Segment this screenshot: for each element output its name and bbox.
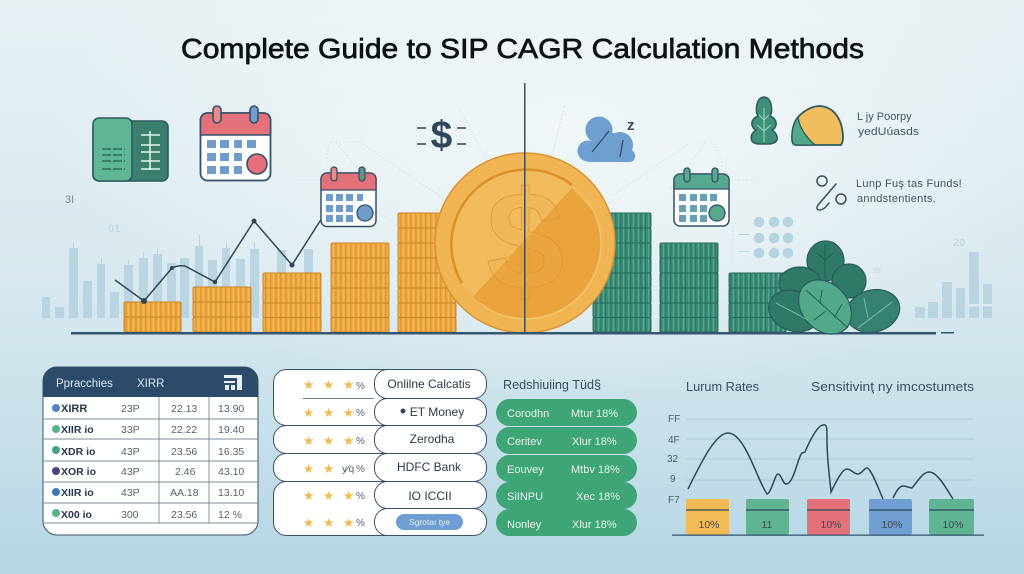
panel: green funds list bbox=[496, 378, 637, 536]
icon: small tree bbox=[751, 97, 777, 144]
text: lump sum note: Lunp Fuş tas Funds! bbox=[856, 178, 962, 190]
gold stack 4 bbox=[331, 243, 389, 332]
gold stack 2 bbox=[193, 287, 251, 332]
table rows: 300 bbox=[121, 509, 139, 521]
star rows: ★ bbox=[323, 489, 334, 503]
chart headings bbox=[686, 380, 974, 394]
faint axis numbers: 20 bbox=[953, 237, 965, 249]
star rows: ★ bbox=[303, 516, 314, 530]
green coin stacks bbox=[593, 213, 786, 332]
panel: star ratings and platforms bbox=[274, 370, 486, 536]
panel: star ratings and platforms: % bbox=[356, 436, 365, 447]
y axis labels: F7 bbox=[668, 495, 680, 506]
table rows: 43P bbox=[121, 466, 140, 478]
text: lump sum note bbox=[856, 178, 962, 205]
table header: XIRR bbox=[137, 378, 164, 390]
table rows bbox=[52, 403, 244, 521]
faint axis numbers: 33 bbox=[873, 268, 881, 275]
title: Complete Guide to SIP CAGR Calculation Methods bbox=[181, 33, 864, 64]
panel: star ratings and platforms: HDFC Bank bbox=[397, 460, 462, 474]
bar values: 10% bbox=[942, 519, 964, 531]
icon: blue cloud bbox=[578, 116, 635, 162]
panel: green funds list: Xlur 18% bbox=[572, 519, 617, 531]
green stack 1 bbox=[593, 213, 651, 332]
panel: green funds list: Mtur 18% bbox=[571, 408, 618, 420]
star rows: ★ bbox=[303, 434, 314, 448]
y axis labels: 9 bbox=[670, 474, 676, 485]
icon: central gold dollar coin bbox=[435, 153, 620, 340]
y axis labels: FF bbox=[668, 414, 680, 425]
panel: star ratings and platforms: IO ICCII bbox=[408, 489, 452, 503]
star rows: ★ bbox=[323, 434, 334, 448]
star rows: ★ bbox=[303, 462, 314, 476]
panel: sensitivity chart bbox=[667, 380, 984, 536]
table rows: 33P bbox=[121, 424, 140, 436]
text: top right note bbox=[857, 111, 920, 138]
icon: spreadsheet notebook bbox=[93, 118, 168, 181]
star rows: ★ bbox=[323, 406, 334, 420]
table rows: XOR io bbox=[61, 466, 96, 478]
table header bbox=[43, 367, 258, 397]
text: top right note: yedUúasds bbox=[858, 126, 920, 138]
chart headings: Sensitivinţ ny imcostumets bbox=[811, 380, 974, 394]
dotted guide lines bbox=[293, 105, 755, 270]
star rows: ★ bbox=[343, 489, 354, 503]
sensitivity line bbox=[688, 425, 953, 499]
chart bars bbox=[686, 499, 974, 534]
table rows: 22.22 bbox=[171, 424, 197, 436]
panel: green funds list: Xec 18% bbox=[576, 491, 620, 503]
table rows: 23.56 bbox=[171, 446, 197, 458]
icon: calendar small blue bbox=[321, 167, 376, 226]
table rows: 43P bbox=[121, 446, 140, 458]
bar values: 10% bbox=[698, 519, 720, 531]
rating pills bbox=[274, 370, 414, 536]
text: top right note: L jy Poorpy bbox=[857, 111, 912, 123]
star rows: ★ bbox=[343, 406, 354, 420]
growth line chart bbox=[115, 218, 322, 304]
y axis labels: 4F bbox=[668, 435, 680, 446]
star rows: ★ bbox=[323, 516, 334, 530]
panel: star ratings and platforms: y⁄q bbox=[342, 464, 354, 475]
table rows: 2.46 bbox=[175, 466, 196, 478]
star rows bbox=[303, 378, 354, 530]
faded background bars: right bbox=[915, 252, 993, 318]
ground baseline bbox=[71, 332, 954, 334]
center divider line bbox=[524, 83, 526, 333]
bar values: 10% bbox=[881, 519, 903, 531]
star rows: ★ bbox=[343, 378, 354, 392]
panel: XIRR comparison table bbox=[43, 367, 258, 535]
table rows: XIIR io bbox=[61, 424, 94, 436]
faint axis numbers: 3I bbox=[65, 194, 74, 206]
chart baseline bbox=[672, 534, 984, 536]
icon: calendar large bbox=[200, 106, 270, 180]
icon: dollar symbol with dashes bbox=[417, 114, 466, 157]
text: lump sum note: anndstentients. bbox=[857, 193, 936, 205]
panel: star ratings and platforms: % bbox=[356, 464, 365, 475]
panel: green funds list: Eouvey bbox=[507, 464, 544, 476]
star rows: ★ bbox=[323, 462, 334, 476]
bar values: 10% bbox=[820, 519, 842, 531]
star rows: ★ bbox=[343, 434, 354, 448]
table rows: 19.40 bbox=[218, 424, 244, 436]
panel: green funds list: Mtbv 18% bbox=[571, 464, 620, 476]
table rows: 13.90 bbox=[218, 403, 244, 415]
y axis labels: 32 bbox=[667, 454, 679, 465]
table rows: 43.10 bbox=[218, 466, 244, 478]
platform pills bbox=[374, 370, 486, 536]
icon: leaves cluster bbox=[763, 241, 905, 345]
table rows: 43P bbox=[121, 487, 140, 499]
green stack 3 bbox=[729, 273, 786, 332]
icon: central gold dollar coin: $ bbox=[486, 162, 564, 319]
gold stack 3 bbox=[263, 273, 321, 332]
table rows: XDR io bbox=[61, 446, 95, 458]
panel: star ratings and platforms: % bbox=[356, 518, 365, 529]
icon: calendar small green bbox=[674, 168, 729, 226]
icon: percent hook bbox=[817, 176, 846, 210]
panel: star ratings and platforms: Zerodha bbox=[410, 432, 455, 446]
panel: green funds list: SiINPU bbox=[507, 491, 543, 503]
star rows: ★ bbox=[303, 406, 314, 420]
icon: blue cloud: z bbox=[627, 117, 634, 134]
table rows: AA.18 bbox=[170, 487, 199, 499]
icon: dollar symbol with dashes: $ bbox=[431, 114, 453, 157]
table rows: 22.13 bbox=[171, 403, 197, 415]
bar values: 11 bbox=[762, 519, 773, 531]
y axis labels bbox=[667, 414, 680, 506]
panel: star ratings and platforms: % bbox=[356, 491, 365, 502]
gold stack 1 bbox=[124, 302, 181, 332]
icon: half moon yellow and green bbox=[792, 106, 843, 145]
star rows: ★ bbox=[343, 516, 354, 530]
green stack 2 bbox=[660, 243, 718, 332]
table rows: 12 % bbox=[218, 509, 242, 521]
table rows: X00 io bbox=[61, 509, 92, 521]
faded background bars: left bbox=[42, 235, 313, 318]
table rows: 16.35 bbox=[218, 446, 244, 458]
table rows: XIRR bbox=[61, 403, 87, 415]
bar values bbox=[698, 519, 964, 531]
table rows: XIIR io bbox=[61, 487, 94, 499]
table grid bbox=[43, 397, 258, 523]
star rows: ★ bbox=[303, 378, 314, 392]
panel: star ratings and platforms: ET Money bbox=[410, 405, 464, 419]
list heading: Redshiuiing Tüd§ bbox=[503, 378, 601, 392]
panel: star ratings and platforms: Onlilne Calcatis bbox=[387, 377, 471, 391]
star rows: ★ bbox=[303, 489, 314, 503]
table header: Ppracchies bbox=[56, 378, 113, 390]
chart grid bbox=[686, 419, 973, 480]
gold coin stacks bbox=[124, 213, 456, 332]
panel: green funds list: Ceritev bbox=[507, 436, 542, 448]
panel: star ratings and platforms: % bbox=[356, 381, 365, 392]
panel: green funds list: Nonley bbox=[507, 519, 542, 531]
star rows: ★ bbox=[323, 378, 334, 392]
faint axis numbers bbox=[65, 194, 965, 275]
button pill bbox=[396, 514, 463, 530]
gold stack 5 bbox=[398, 213, 456, 332]
table rows: 23P bbox=[121, 403, 140, 415]
panel: star ratings and platforms: % bbox=[356, 408, 365, 419]
table rows: 23.56 bbox=[171, 509, 197, 521]
button pill: Sgrotaı ṭye bbox=[409, 517, 450, 527]
table rows: 13.10 bbox=[218, 487, 244, 499]
chart headings: Lurum Rates bbox=[686, 380, 759, 394]
panel: green funds list: Corodhn bbox=[507, 408, 549, 420]
panel: green funds list: Xlur 18% bbox=[572, 436, 617, 448]
decorative dot grid bbox=[739, 217, 793, 258]
faint axis numbers: 01 bbox=[108, 223, 120, 235]
